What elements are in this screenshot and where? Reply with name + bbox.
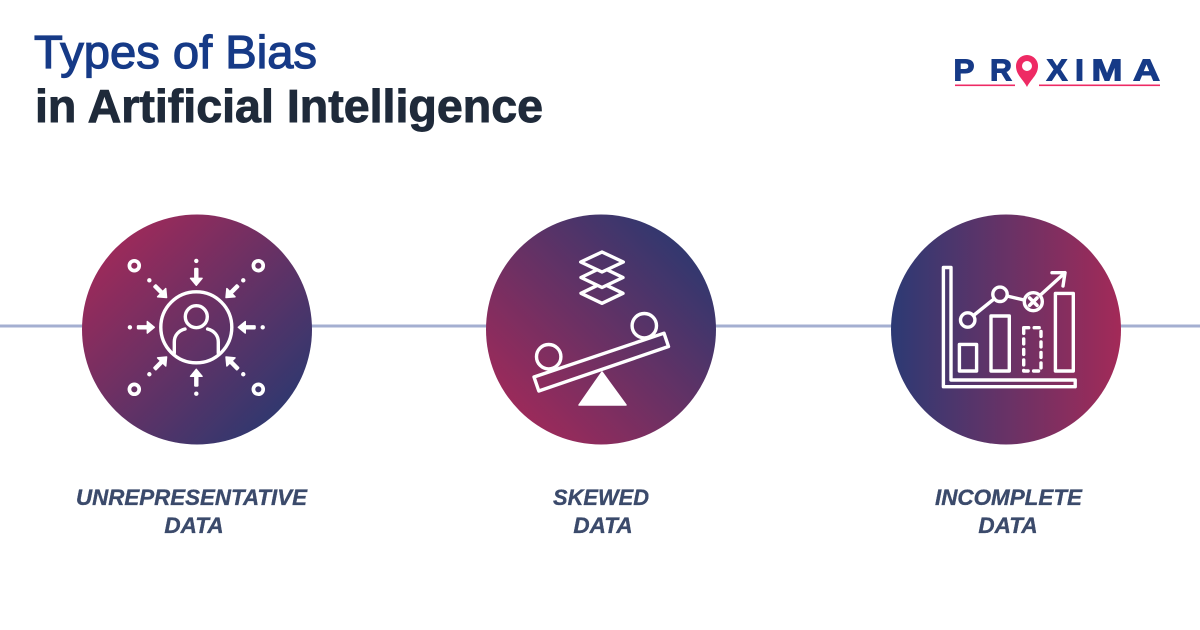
icon: person with inward arrows <box>128 259 265 396</box>
label: skewed data: DATA <box>573 513 633 538</box>
logo: Proxima <box>954 53 1160 88</box>
label: incomplete data: DATA <box>978 513 1038 538</box>
logo: Proxima: P <box>954 53 974 88</box>
icon: seesaw with balls <box>534 314 668 405</box>
panel: skewed data <box>486 214 716 444</box>
logo: Proxima: R <box>990 53 1012 88</box>
icon: layers <box>581 252 623 303</box>
label: skewed data: SKEWED <box>553 485 649 510</box>
label: unrepresentative data: DATA <box>164 513 224 538</box>
panel: incomplete data <box>891 214 1121 444</box>
label: unrepresentative data: UNREPRESENTATIVE <box>76 485 308 510</box>
panel: unrepresentative data <box>82 214 312 444</box>
logo: Proxima: A <box>1133 53 1160 88</box>
logo: Proxima: M <box>1092 53 1122 88</box>
label: incomplete data: INCOMPLETE <box>935 485 1083 510</box>
logo: Proxima: X <box>1046 53 1068 88</box>
icon: bar chart with missing bar <box>943 268 1075 387</box>
title: in Artificial Intelligence <box>35 80 543 132</box>
title: Types of Bias <box>34 26 317 78</box>
title <box>34 26 543 132</box>
logo: Proxima: I <box>1075 53 1084 88</box>
connecting line <box>0 324 1200 328</box>
